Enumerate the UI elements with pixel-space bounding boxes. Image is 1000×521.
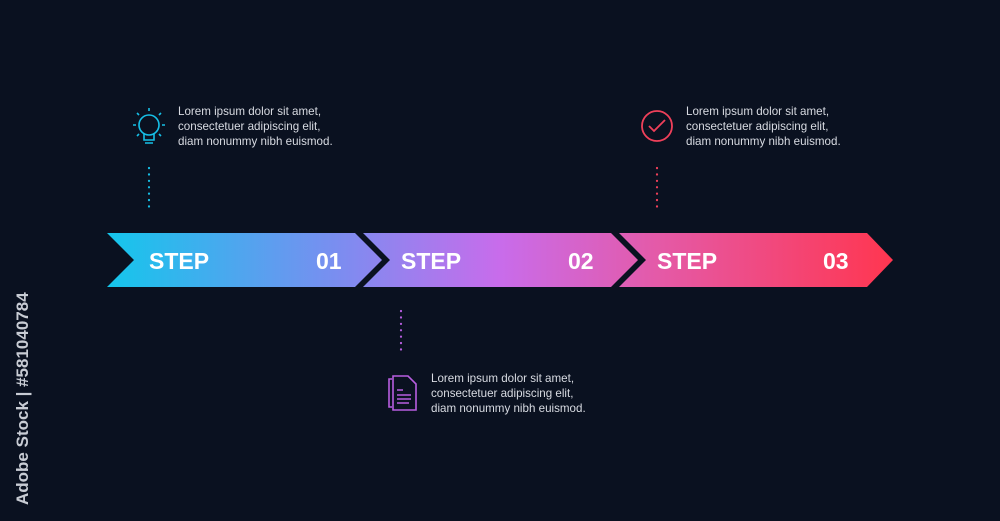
dotted line: step 1 [148, 168, 150, 212]
text block: step 3: diam nonummy nibh euismod. [686, 135, 841, 148]
icon: check circle [642, 111, 672, 141]
dotted line: step 2 [400, 311, 402, 355]
dotted line: step 3 [656, 168, 658, 212]
arrow: step 01: STEP [149, 248, 209, 274]
text block: step 2: diam nonummy nibh euismod. [431, 402, 586, 415]
arrow: step 02: 02 [568, 248, 594, 274]
text block: step 2: consectetuer adipiscing elit, [431, 387, 573, 400]
text block: step 1: consectetuer adipiscing elit, [178, 120, 320, 133]
text block: step 1: Lorem ipsum dolor sit amet, [178, 105, 321, 118]
arrow: step 01: 01 [316, 248, 342, 274]
arrow: step 03: 03 [823, 248, 849, 274]
icon: documents [389, 376, 416, 410]
arrow: step 02: STEP [401, 248, 461, 274]
text block: step 2: Lorem ipsum dolor sit amet, [431, 372, 574, 385]
text block: step 1: diam nonummy nibh euismod. [178, 135, 333, 148]
icon: light bulb [133, 108, 165, 143]
watermark side text: Adobe Stock | #581040784 [13, 292, 32, 505]
arrow: step 03 [619, 233, 893, 287]
arrow: step 01 [107, 233, 382, 287]
arrow: step 03: STEP [657, 248, 717, 274]
text block: step 3: Lorem ipsum dolor sit amet, [686, 105, 829, 118]
arrow: step 02 [363, 233, 638, 287]
text block: step 3: consectetuer adipiscing elit, [686, 120, 828, 133]
